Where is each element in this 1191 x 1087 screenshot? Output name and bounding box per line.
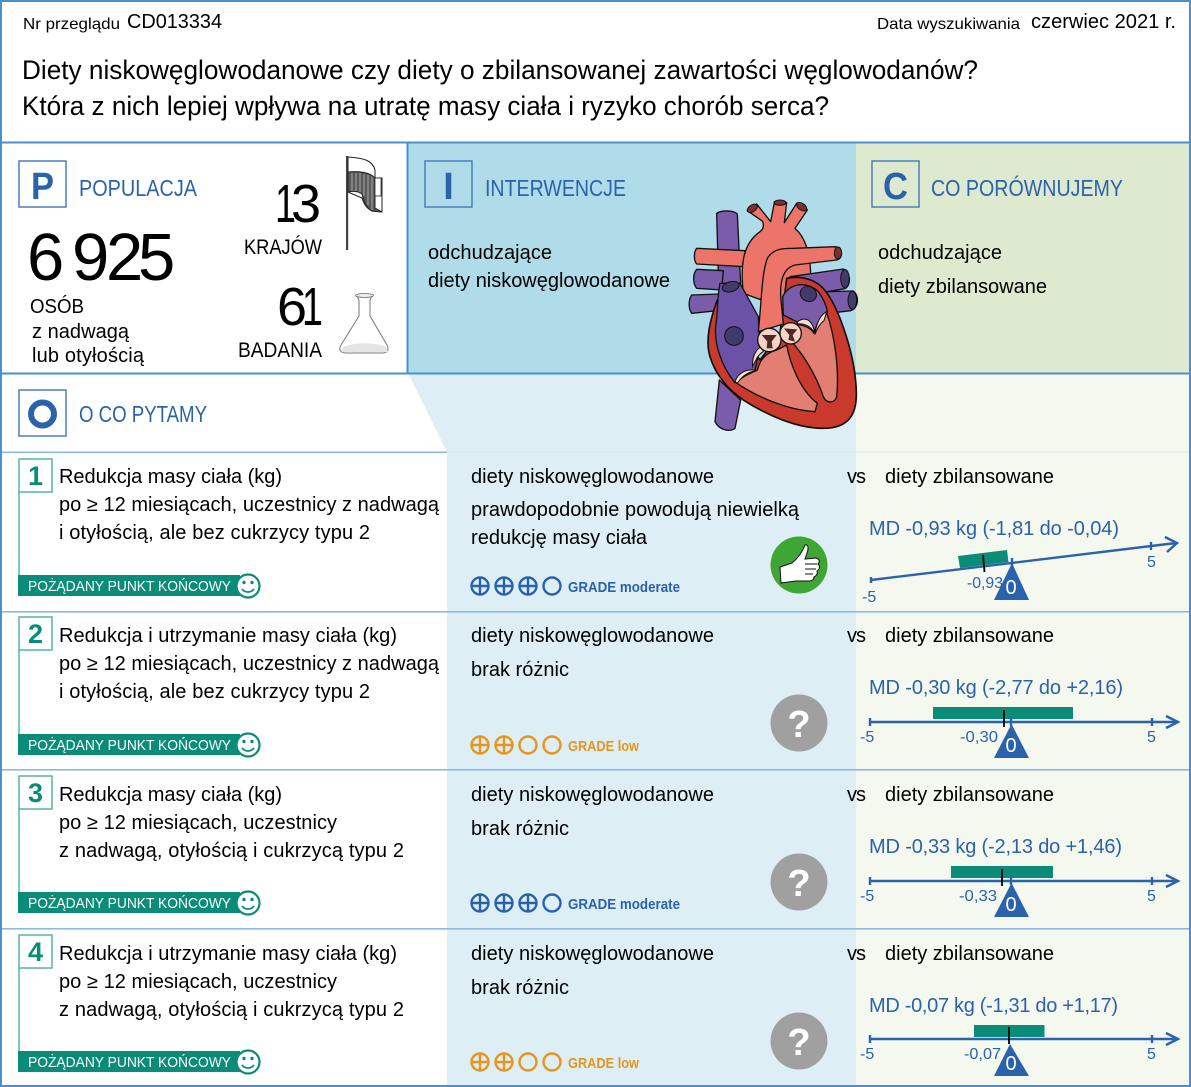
I badge: I	[443, 166, 454, 208]
finding text: redukcję masy ciała	[471, 527, 648, 549]
outcomes heading text: O CO PYTAMY	[79, 401, 207, 427]
forest plot 4: -5	[860, 1046, 874, 1063]
finding text	[471, 625, 1054, 681]
outcome 4 description	[19, 935, 404, 1052]
finding text	[471, 784, 1054, 840]
outcome 4 description: Redukcja i utrzymanie masy ciała (kg)	[59, 943, 397, 965]
forest plot 2: -0,30	[960, 729, 998, 746]
participants description: OSÓB	[30, 295, 84, 318]
panel: comparison	[872, 161, 1123, 298]
outcome 4 description: po ≥ 12 miesiącach, uczestnicy	[59, 971, 337, 993]
icon: question mark	[770, 694, 828, 752]
outcome 2 description: Redukcja i utrzymanie masy ciała (kg)	[59, 625, 397, 647]
forest plot 4: 5	[1147, 1046, 1156, 1063]
icon: question mark: ?	[787, 1022, 811, 1064]
icon: question mark	[770, 1012, 828, 1070]
forest plot 2	[860, 677, 1178, 758]
forest plot 1: 0	[1005, 577, 1017, 599]
icon: question mark: ?	[787, 863, 811, 905]
forest plot 4: -0,07	[964, 1046, 1001, 1063]
finding text: diety niskowęglowodanowe	[471, 784, 714, 806]
header metadata: Data wyszukiwania	[877, 16, 1020, 33]
outcome 3 description: po ≥ 12 miesiącach, uczestnicy	[59, 812, 337, 834]
countries count: 1	[275, 174, 296, 234]
header metadata: CD013334	[127, 11, 222, 33]
countries count	[244, 174, 322, 259]
forest plot 2: 5	[1147, 729, 1156, 746]
desired endpoint tag: POŻĄDANY PUNKT KOŃCOWY	[28, 894, 231, 912]
I badge	[425, 161, 472, 208]
GRADE rating	[472, 894, 680, 913]
GRADE rating	[472, 736, 639, 755]
panel: population	[19, 156, 388, 367]
forest plot 3: MD -0,33 kg (-2,13 do +1,46)	[869, 836, 1122, 858]
intervention text	[428, 242, 670, 292]
outcome 3 description	[19, 776, 404, 894]
desired endpoint tag: POŻĄDANY PUNKT KOŃCOWY	[28, 736, 231, 754]
finding text: vs	[847, 784, 866, 806]
forest plot 1: MD -0,93 kg (-1,81 do -0,04)	[869, 518, 1119, 540]
P badge: P	[31, 166, 54, 208]
icon: thumbs up	[770, 536, 828, 594]
finding text	[471, 466, 1054, 549]
forest plot 1: -0,93	[967, 575, 1003, 592]
icon: heart	[689, 200, 857, 430]
forest plot 1	[862, 518, 1177, 606]
outcome 2 description: 2	[28, 619, 43, 649]
participants description: z nadwagą	[32, 321, 130, 343]
intervention text: odchudzające	[428, 242, 552, 264]
icon: flag	[346, 156, 382, 250]
forest plot 3: -0,33	[959, 888, 997, 905]
row 2 outcome	[18, 617, 1178, 758]
outcome 1 description: po ≥ 12 miesiącach, uczestnicy z nadwagą	[59, 494, 440, 516]
icon: question mark: ?	[787, 704, 811, 746]
C badge: C	[883, 166, 908, 208]
finding text: brak różnic	[471, 659, 569, 681]
forest plot 4: 0	[1005, 1053, 1017, 1075]
GRADE rating: GRADE low	[568, 738, 639, 755]
finding text: prawdopodobnie powodują niewielką	[471, 499, 800, 521]
header metadata	[23, 11, 1176, 33]
studies count: BADANIA	[238, 339, 322, 362]
outcome 2 description: i otyłością, ale bez cukrzycy typu 2	[59, 681, 370, 703]
outcome 3 description: Redukcja masy ciała (kg)	[59, 784, 282, 806]
outcome 1 description	[19, 459, 440, 576]
comparison text	[878, 242, 1047, 298]
outcome 3 description: z nadwagą, otyłością i cukrzycą typu 2	[59, 840, 404, 862]
desired endpoint tag	[18, 1050, 260, 1074]
intervention heading: INTERWENCJE	[485, 175, 626, 201]
panel: intervention background	[408, 143, 856, 373]
title	[22, 55, 978, 121]
forest plot 3: 0	[1005, 894, 1017, 916]
desired endpoint tag	[18, 574, 260, 598]
population heading: POPULACJA	[79, 175, 198, 201]
forest plot 2: MD -0,30 kg (-2,77 do +2,16)	[869, 677, 1123, 699]
forest plot 4	[860, 995, 1178, 1076]
outcome 4 description: 4	[28, 937, 43, 967]
forest plot 3	[860, 836, 1178, 917]
row 1 outcome	[18, 459, 1177, 606]
panel: comparison background	[856, 143, 1190, 373]
studies count: 1	[302, 277, 323, 337]
outcome 2 description	[19, 617, 440, 735]
studies count: 6	[277, 277, 307, 337]
outcome 4 description: z nadwagą, otyłością i cukrzycą typu 2	[59, 999, 404, 1021]
finding text: brak różnic	[471, 977, 569, 999]
finding text: diety niskowęglowodanowe	[471, 466, 714, 488]
finding text: vs	[847, 625, 866, 647]
forest plot 3: -5	[860, 888, 874, 905]
finding text: diety niskowęglowodanowe	[471, 943, 714, 965]
desired endpoint tag	[18, 734, 260, 756]
title: Która z nich lepiej wpływa na utratę masy ciała i ryzyko chorób serca?	[22, 91, 829, 121]
participants count: 6 925	[27, 220, 175, 295]
outcome 1 description: i otyłością, ale bez cukrzycy typu 2	[59, 522, 370, 544]
finding text: vs	[847, 943, 866, 965]
studies count	[238, 277, 323, 362]
forest plot 3: 5	[1147, 888, 1156, 905]
panel: intervention	[425, 161, 670, 292]
outcome 3 description: 3	[28, 778, 43, 808]
GRADE rating	[472, 1054, 639, 1072]
outcome 2 description: po ≥ 12 miesiącach, uczestnicy z nadwagą	[59, 653, 440, 675]
icon: question mark	[770, 854, 828, 910]
countries count: 3	[291, 174, 321, 234]
finding text: vs	[847, 466, 866, 488]
panel: comparison column background	[856, 373, 1190, 1086]
GRADE rating: GRADE low	[568, 1055, 639, 1072]
GRADE rating: GRADE moderate	[568, 896, 680, 913]
forest plot 2: 0	[1005, 735, 1017, 757]
forest plot 1: 5	[1147, 554, 1156, 571]
comparison text: diety zbilansowane	[878, 276, 1047, 298]
GRADE rating: GRADE moderate	[568, 579, 680, 596]
panel: outcomes heading	[19, 390, 207, 436]
O badge	[19, 390, 66, 436]
comparison heading: CO PORÓWNUJEMY	[931, 175, 1123, 201]
desired endpoint tag: POŻĄDANY PUNKT KOŃCOWY	[28, 577, 231, 595]
panel: intervention column background	[408, 373, 856, 1086]
finding text	[471, 943, 1054, 999]
forest plot 2: -5	[860, 729, 874, 746]
participants description: lub otyłością	[32, 345, 145, 367]
finding text: diety zbilansowane	[885, 943, 1054, 965]
icon: flask	[340, 294, 388, 353]
finding text: diety zbilansowane	[885, 625, 1054, 647]
title: Diety niskowęglowodanowe czy diety o zbilansowanej zawartości węglowodanów?	[22, 55, 978, 85]
finding text: brak różnic	[471, 818, 569, 840]
comparison text: odchudzające	[878, 242, 1002, 264]
header metadata: Nr przeglądu	[23, 16, 120, 33]
forest plot 1: -5	[862, 589, 876, 606]
P badge	[19, 161, 66, 208]
countries count: KRAJÓW	[244, 236, 322, 259]
outcome 1 description: Redukcja masy ciała (kg)	[59, 466, 282, 488]
header metadata: czerwiec 2021 r.	[1031, 11, 1176, 33]
C badge	[872, 161, 919, 208]
desired endpoint tag	[18, 892, 260, 914]
GRADE rating	[472, 578, 680, 596]
finding text: diety zbilansowane	[885, 784, 1054, 806]
finding text: diety zbilansowane	[885, 466, 1054, 488]
participants description	[30, 295, 145, 367]
row 4 outcome	[18, 935, 1178, 1076]
desired endpoint tag: POŻĄDANY PUNKT KOŃCOWY	[28, 1053, 231, 1071]
row 3 outcome	[18, 776, 1178, 917]
finding text: diety niskowęglowodanowe	[471, 625, 714, 647]
outcome 1 description: 1	[28, 461, 43, 491]
intervention text: diety niskowęglowodanowe	[428, 270, 670, 292]
forest plot 4: MD -0,07 kg (-1,31 do +1,17)	[869, 995, 1118, 1017]
